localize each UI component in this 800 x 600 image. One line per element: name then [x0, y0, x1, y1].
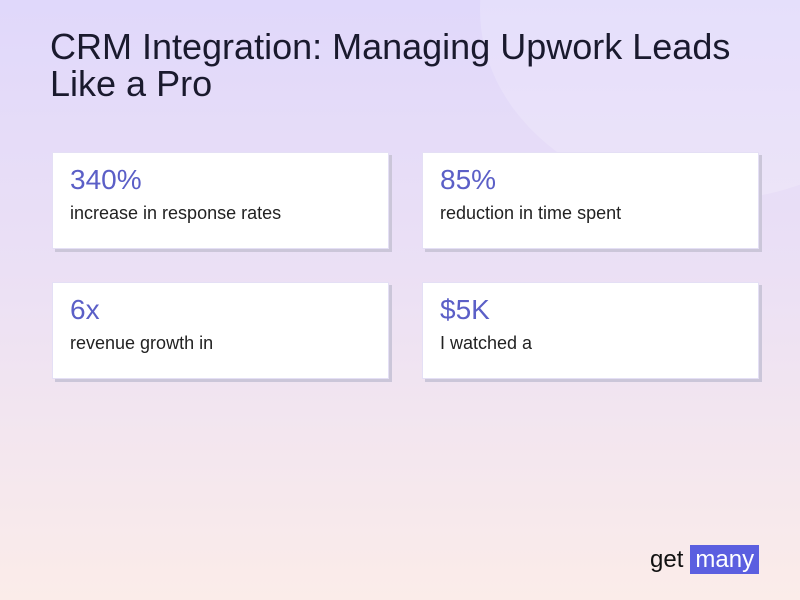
card: 85% — [422, 152, 759, 249]
logo — [650, 545, 759, 574]
card: 340% — [52, 152, 389, 249]
card: 6x: 6x — [70, 294, 100, 325]
card: 6x: revenue growth in — [70, 333, 213, 353]
card: 85%: 85% — [440, 164, 496, 195]
card: $5K: I watched a — [440, 333, 532, 353]
logo: many — [695, 546, 754, 573]
card: 85%: reduction in time spent — [440, 203, 621, 223]
card: 6x — [52, 282, 389, 379]
card: $5K: $5K — [440, 294, 490, 325]
logo: get — [650, 546, 683, 572]
card: 340%: increase in response rates — [70, 203, 281, 223]
card: $5K — [422, 282, 759, 379]
title: CRM Integration: Managing Upwork Leads Like a Pro — [50, 26, 730, 104]
card: 340%: 340% — [70, 164, 142, 195]
